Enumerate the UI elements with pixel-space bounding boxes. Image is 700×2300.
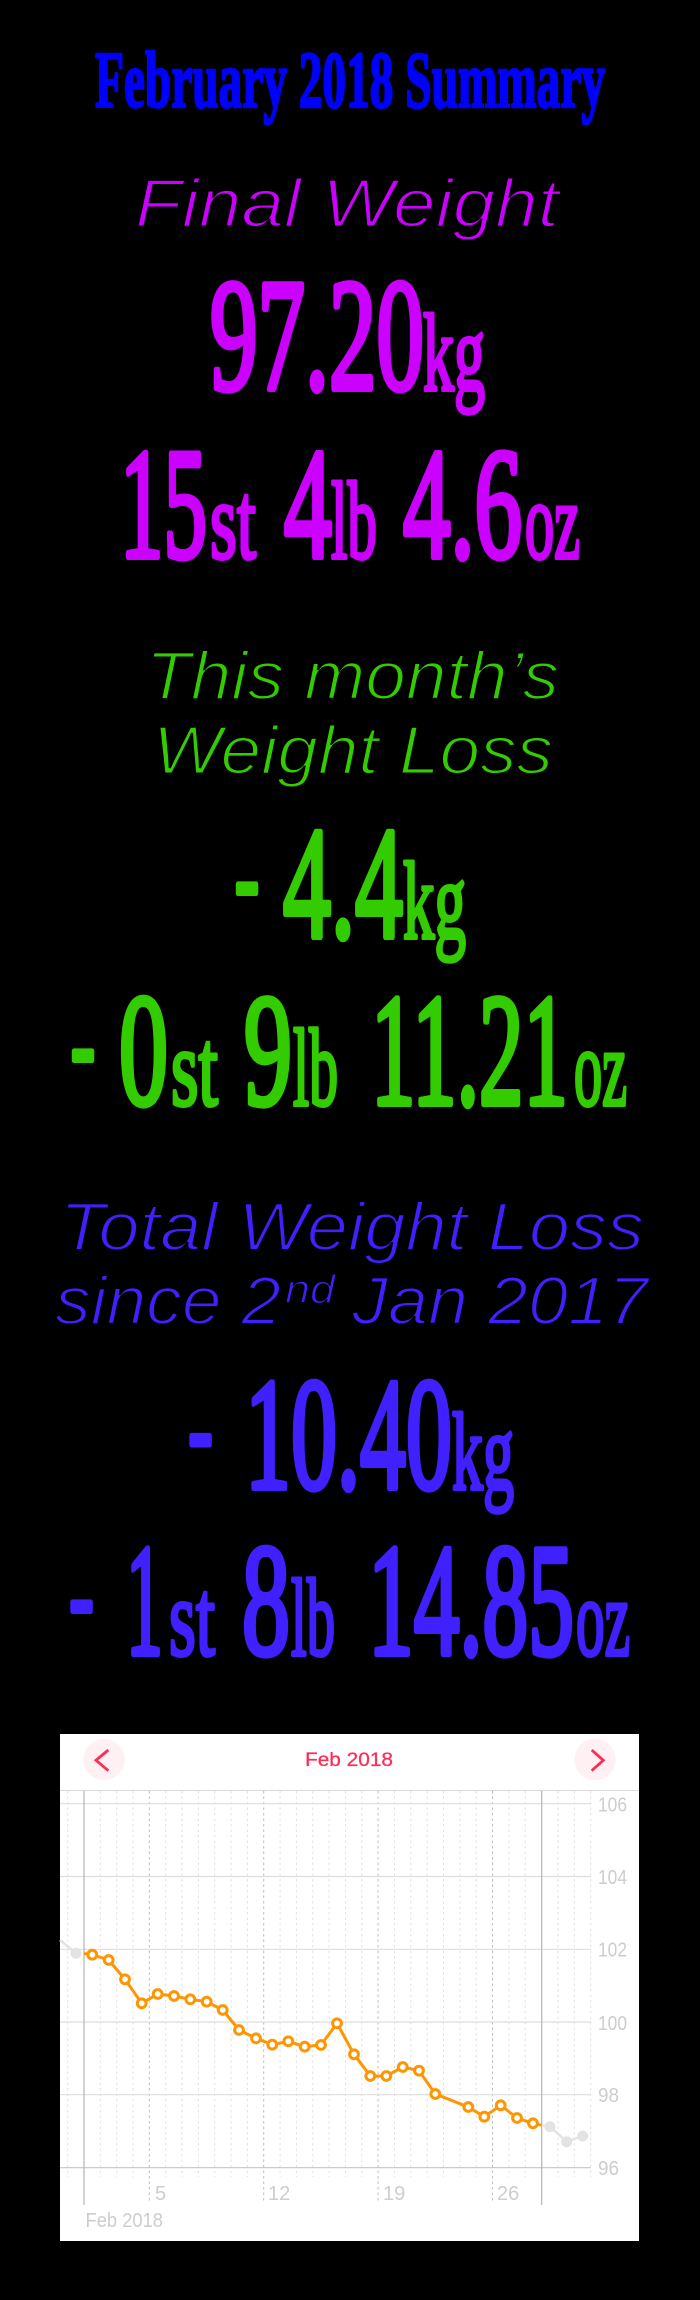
metric: total loss in stones, pounds and ounces: -: [70, 1532, 94, 1659]
x axis labels: [155, 2183, 519, 2205]
panel: total weight loss: [55, 1189, 650, 1689]
y axis labels: 96: [598, 2158, 619, 2180]
metric: monthly loss in stones, pounds and ounces: oz: [574, 1007, 627, 1129]
metric: total loss in kilograms: [188, 1345, 514, 1523]
metric: monthly loss in kilograms: 4.4: [283, 794, 403, 972]
heading: this month's weight loss: Weight Loss: [153, 712, 553, 788]
heading: total weight loss since 2nd Jan 2017: Jan 2017: [351, 1263, 650, 1339]
previous month data: [60, 1940, 82, 1959]
metric: total loss in stones, pounds and ounces: lb: [291, 1557, 335, 1679]
panel: final weight: [120, 166, 580, 592]
y axis labels: 102: [598, 1940, 627, 1962]
line chart: daily weight: [60, 1791, 591, 2205]
y axis labels: 104: [598, 1867, 627, 1889]
chart header bar: [60, 1739, 639, 1790]
metric: weight in stones, pounds and ounces: lb: [331, 460, 377, 582]
metric: weight in stones, pounds and ounces: 15: [120, 417, 207, 592]
metric: weight in stones, pounds and ounces: oz: [525, 460, 580, 582]
metric: weight in stones, pounds and ounces: 4.6: [403, 417, 522, 592]
metric: weight in stones, pounds and ounces: [120, 417, 580, 592]
y axis labels: 100: [598, 2013, 627, 2035]
metric: weight in kilograms: kg: [423, 292, 485, 414]
metric: monthly loss in stones, pounds and ounces: -: [71, 981, 95, 1108]
metric: monthly loss in stones, pounds and ounces: [71, 961, 627, 1139]
heading: final weight: Final Weight: [135, 166, 562, 242]
heading: this month's weight loss: This month’s: [146, 638, 559, 714]
y axis labels: 98: [598, 2085, 619, 2107]
metric: weight in stones, pounds and ounces: st: [210, 460, 256, 582]
next month data: [542, 2121, 588, 2147]
metric: total loss in stones, pounds and ounces: 8: [242, 1511, 290, 1689]
metric: monthly loss in kilograms: kg: [403, 840, 466, 962]
metric: total loss in stones, pounds and ounces: oz: [576, 1557, 630, 1679]
x axis labels: 5: [155, 2183, 166, 2205]
metric: monthly loss in stones, pounds and ounces: st: [171, 1007, 218, 1129]
heading: total weight loss since 2nd Jan 2017: since 2: [55, 1263, 281, 1339]
metric: monthly loss in kilograms: -: [235, 814, 259, 941]
chart month label: Feb 2018: [305, 1749, 393, 1771]
metric: total loss in kilograms: 10.40: [245, 1345, 452, 1523]
orange weight line: [84, 1954, 542, 2125]
y axis labels: [598, 1794, 627, 2180]
heading: this month's weight loss: [146, 638, 559, 788]
heading: total weight loss since 2nd Jan 2017: Total Weight Loss: [60, 1189, 644, 1265]
metric: monthly loss in stones, pounds and ounces: 9: [244, 961, 292, 1139]
x axis month caption: Feb 2018: [86, 2210, 163, 2232]
orange data points: [88, 1950, 537, 2128]
x axis labels: 19: [383, 2183, 405, 2205]
x axis labels: 26: [497, 2183, 519, 2205]
x axis labels: 12: [268, 2183, 290, 2205]
panel: this month's weight loss: [71, 638, 627, 1139]
icon: next month button: [574, 1739, 616, 1780]
metric: total loss in kilograms: kg: [452, 1391, 514, 1513]
metric: total loss in stones, pounds and ounces: [70, 1511, 630, 1689]
icon: previous month button: [83, 1739, 125, 1780]
heading: total weight loss since 2nd Jan 2017: nd: [285, 1268, 337, 1312]
panel: weight chart screenshot: [60, 1734, 639, 2241]
y axis labels: 106: [598, 1794, 627, 1816]
metric: monthly loss in stones, pounds and ounces: 0: [119, 961, 168, 1139]
metric: total loss in kilograms: -: [188, 1366, 212, 1492]
heading: total weight loss since 2nd Jan 2017: [55, 1189, 650, 1339]
metric: total loss in stones, pounds and ounces: st: [169, 1557, 215, 1679]
metric: monthly loss in stones, pounds and ounces: lb: [293, 1007, 338, 1129]
metric: weight in kilograms: 97.20: [210, 246, 424, 424]
metric: total loss in stones, pounds and ounces: 1: [126, 1511, 163, 1689]
metric: weight in stones, pounds and ounces: 4: [284, 417, 332, 592]
